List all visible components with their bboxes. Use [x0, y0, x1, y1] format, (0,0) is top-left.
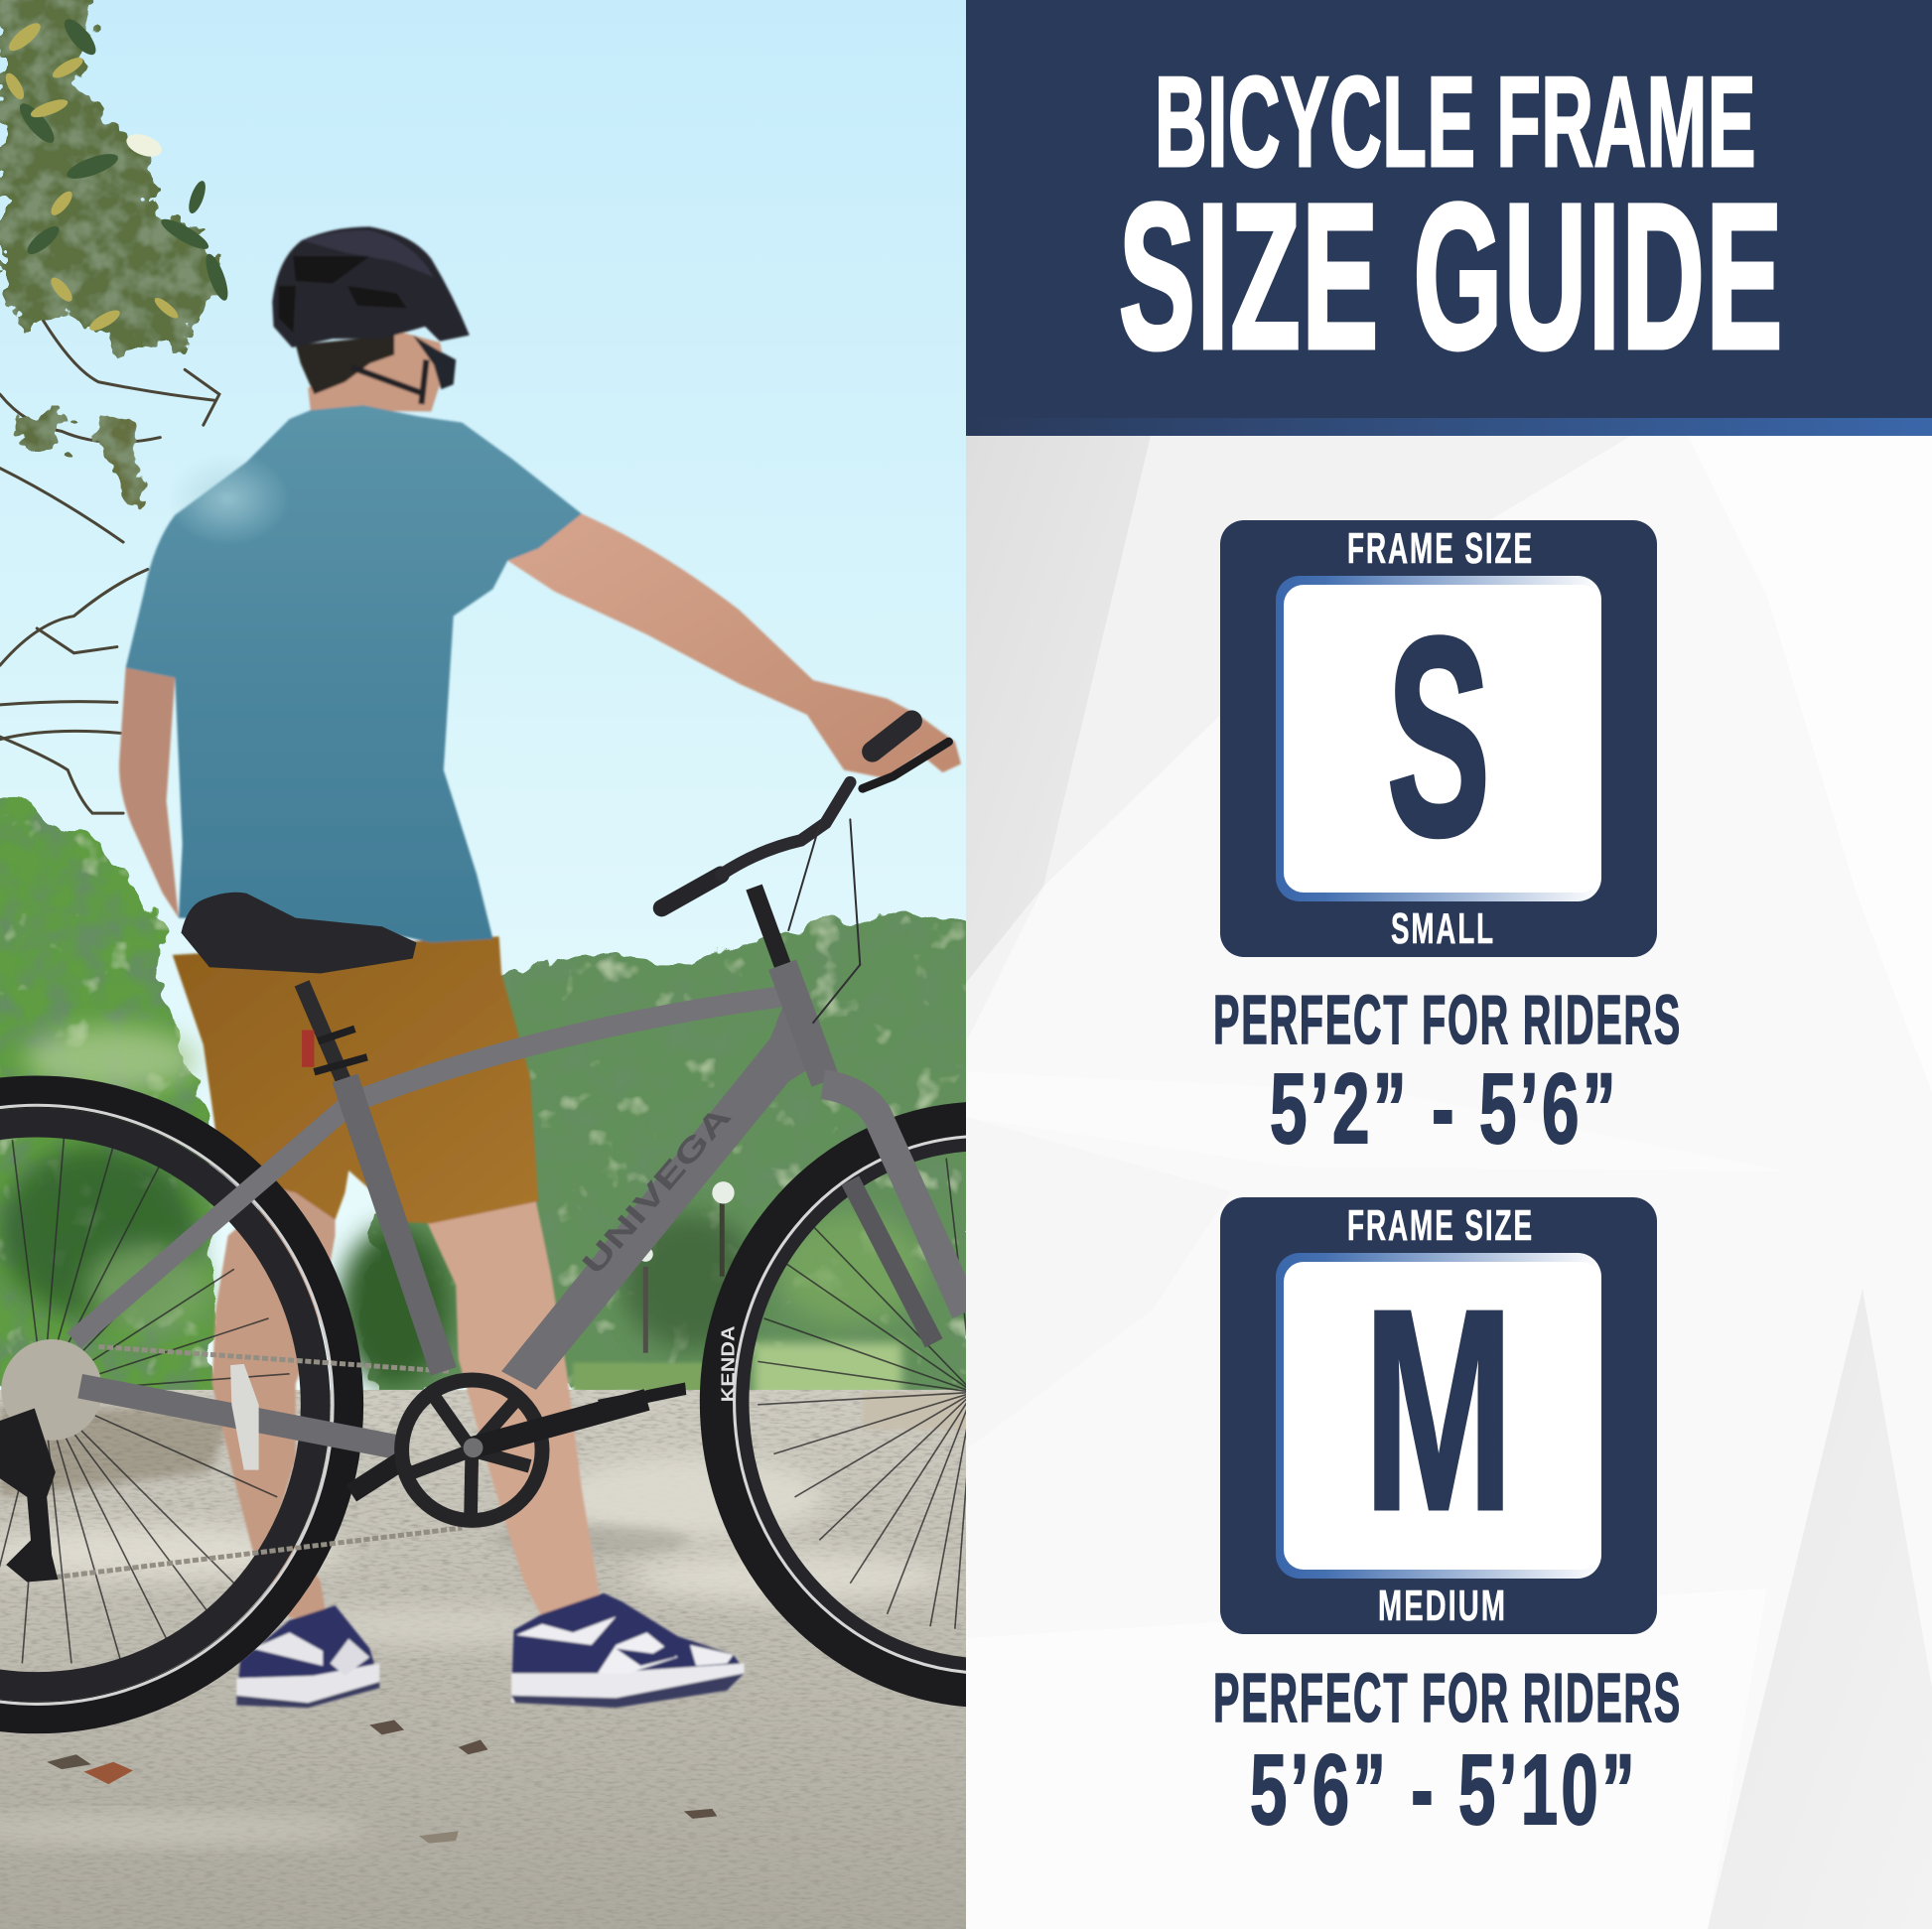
header accent band: [966, 418, 1932, 436]
teal shirt: [126, 405, 582, 942]
spoke reflector: [230, 1364, 259, 1470]
photo: rider standing beside bicycle: [0, 0, 966, 1929]
shirt highlight: [179, 463, 282, 540]
front leg: [428, 1201, 600, 1618]
left shoe: [236, 1605, 379, 1708]
cassette: [1, 1339, 102, 1441]
medium height range: 5’6” - 5’10”: [1250, 1734, 1638, 1846]
socks: [542, 1595, 607, 1629]
size letter: S: [1387, 580, 1490, 895]
tree branches top left: [0, 321, 219, 813]
rear triangle and top tube: [73, 996, 788, 1340]
down tube: [501, 992, 823, 1390]
chain stay: [80, 1386, 400, 1447]
chain: [56, 1346, 462, 1578]
grass strip: [570, 1337, 907, 1390]
size letter: M: [1363, 1250, 1514, 1571]
kickstand: [351, 1457, 407, 1493]
leaves on ground: [83, 1762, 133, 1784]
chainring: [402, 1380, 542, 1520]
tree canopy top left: [0, 0, 232, 505]
front wheel tyre: [698, 1101, 1274, 1709]
outstretched arm: [507, 514, 961, 778]
background trees left: [0, 788, 215, 1392]
size card: medium: [1220, 1197, 1657, 1634]
header banner: [966, 0, 1932, 436]
rear derailleur: [0, 1409, 58, 1583]
letter tile: [1276, 1250, 1601, 1579]
bicycle: [0, 721, 1274, 1718]
small leaf cluster: [14, 412, 72, 451]
rider: [119, 226, 961, 1708]
fork: [823, 1084, 966, 1312]
front fork rear blade: [850, 1180, 934, 1343]
letter tile: [1276, 576, 1601, 901]
chin strap: [351, 359, 426, 404]
tyre brand: KENDA: [718, 1325, 739, 1402]
frame size label: FRAME SIZE: [1347, 524, 1534, 573]
neck and head: [308, 331, 446, 412]
ground: [0, 1390, 966, 1929]
crank arm and pedal: [464, 1382, 686, 1457]
stem and steerer: [755, 888, 782, 965]
small leaf cluster lower: [95, 411, 152, 505]
handlebar: [661, 721, 949, 1023]
seat post: [302, 983, 345, 1084]
seat clamp and rear light: [302, 1029, 367, 1072]
magnolia flower: [126, 134, 162, 157]
small height range: 5’2” - 5’6”: [1270, 1053, 1619, 1165]
sky: [0, 0, 966, 1405]
rear wheel spokes: [0, 1136, 290, 1670]
frame size label: FRAME SIZE: [1347, 1201, 1534, 1250]
right shoe: [511, 1593, 745, 1708]
lamp posts: [638, 1181, 735, 1353]
head tube: [782, 965, 826, 1082]
far arm: [119, 668, 179, 918]
helmet: [272, 226, 470, 347]
back leg: [211, 1182, 336, 1618]
saddle: [181, 893, 416, 973]
frame logo: UNIVEGA: [575, 1099, 738, 1281]
seat tube: [345, 1078, 444, 1371]
sunglasses: [413, 336, 456, 389]
rear wheel tyre: [0, 1092, 347, 1718]
size name: MEDIUM: [1378, 1582, 1507, 1630]
panel: white faceted background: [966, 436, 1932, 1929]
size name: SMALL: [1391, 904, 1495, 953]
hair: [296, 336, 394, 394]
front wheel spokes: [758, 1159, 973, 1629]
shorts: [173, 936, 538, 1223]
background trees right: [339, 911, 973, 1392]
size card: small: [1220, 520, 1657, 957]
